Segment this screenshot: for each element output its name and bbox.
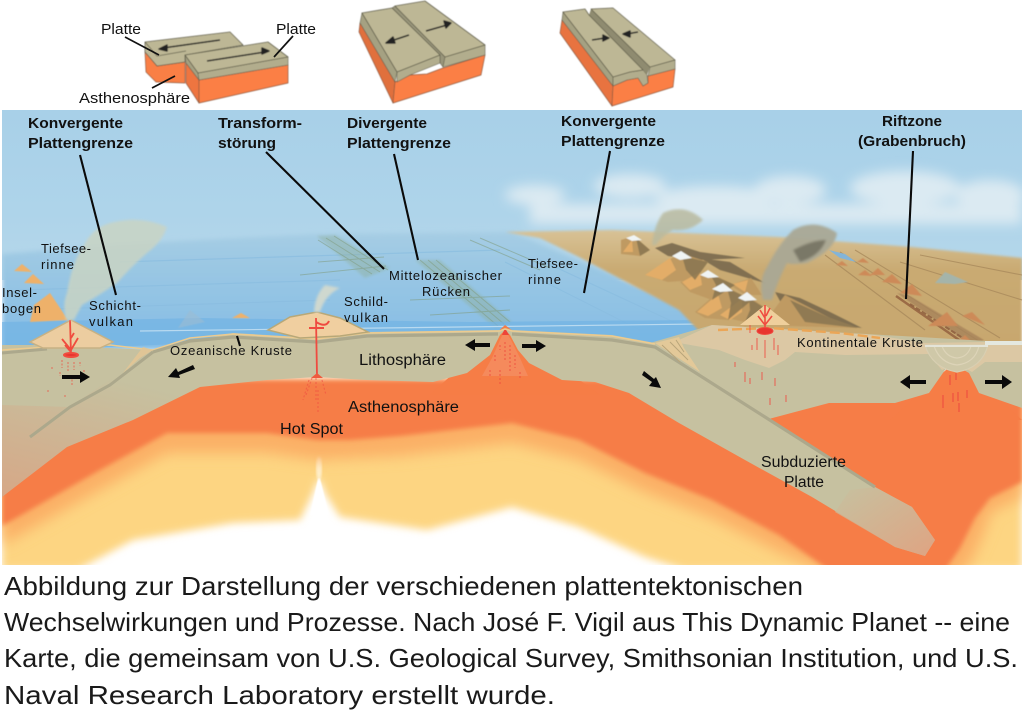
caption: Karte, die gemeinsam von U.S. Geological Survey, Smithsonian Institution, und U.S. xyxy=(4,643,1018,673)
label: Tiefseerinne left: rinne xyxy=(41,257,74,272)
lithosphere main plate xyxy=(2,328,935,556)
diagram: divergent block xyxy=(359,1,485,103)
hot spot white tip xyxy=(312,456,326,506)
label: Asthenosphaere top xyxy=(79,76,190,107)
plume continent far xyxy=(652,209,703,245)
continental crust xyxy=(679,325,1022,372)
transition layer yellow-orange xyxy=(2,380,1022,575)
label: Inselbogen xyxy=(2,285,41,316)
label: Mittelozeanischer Ruecken: Rücken xyxy=(422,284,470,299)
label: Tiefseerinne right: rinne xyxy=(528,272,561,287)
leader lines xyxy=(80,151,913,346)
arrows: plate motion xyxy=(62,339,1012,389)
magma left xyxy=(48,320,84,398)
label: Ozeanische Kruste: Ozeanische Kruste xyxy=(170,343,292,358)
clouds xyxy=(505,171,1024,224)
ocean xyxy=(2,232,720,350)
panel: tectonic cross section xyxy=(2,110,1024,575)
shield volcano xyxy=(268,312,368,338)
label: Lithosphaere: Lithosphäre xyxy=(359,352,446,369)
continental strata xyxy=(718,328,880,338)
label: Inselbogen: bogen xyxy=(2,301,41,316)
ocean trench shading xyxy=(135,250,594,288)
label: Tiefseerinne left xyxy=(41,241,91,272)
label: Transformstoerung xyxy=(218,115,302,152)
islands xyxy=(14,264,250,328)
label: Divergente Plattengrenze xyxy=(347,115,451,152)
rift graben xyxy=(896,293,984,340)
land xyxy=(505,230,1022,345)
label: Mittelozeanischer Ruecken: Mittelozeanischer xyxy=(389,268,503,283)
label: Riftzone xyxy=(858,113,966,150)
rift crust arcs xyxy=(925,343,1022,372)
label: Divergente Plattengrenze: Divergente xyxy=(347,115,427,132)
arrows: transform motion xyxy=(159,40,269,61)
volcano cone left xyxy=(30,320,113,348)
lake xyxy=(829,250,856,262)
label: Transformstoerung: Transform- xyxy=(218,115,302,132)
diagram: transform fault block xyxy=(145,32,288,103)
sky xyxy=(2,110,1022,280)
label: Konvergente Plattengrenze right: Plattengrenze xyxy=(561,133,665,150)
rift magma xyxy=(943,373,967,412)
label: Subduzierte Platte: Subduzierte xyxy=(761,454,846,471)
asthenosphere orange xyxy=(2,380,1022,570)
label: Platte right: Platte xyxy=(276,21,316,38)
plume shield xyxy=(314,285,340,312)
ridge and rift orange fill beneath plates xyxy=(430,325,1022,420)
left orange under arc xyxy=(2,400,70,460)
label: Konvergente Plattengrenze left: Plattengrenze xyxy=(28,135,133,152)
caption: Wechselwirkungen und Prozesse. Nach José F. Vigil aus This Dynamic Planet -- eine xyxy=(4,607,1010,637)
label: Tiefseerinne left: Tiefsee- xyxy=(41,241,91,256)
label: Hot Spot: Hot Spot xyxy=(280,421,344,438)
ridge magma xyxy=(482,328,528,385)
label: Schildvulkan: Schild- xyxy=(344,294,388,309)
label: Mittelozeanischer Ruecken xyxy=(389,268,503,299)
magma continental volcano xyxy=(735,305,786,405)
accretion wedge right xyxy=(655,337,700,372)
rift lines xyxy=(825,250,1022,345)
mid-ocean ridge stripes xyxy=(300,235,550,328)
caption xyxy=(4,571,1018,710)
caption: Abbildung zur Darstellung der verschiedenen plattentektonischen xyxy=(4,571,803,601)
label: Schichtvulkan: Schicht- xyxy=(89,298,141,313)
continental lithosphere right xyxy=(650,325,1022,420)
arrows: convergent motion xyxy=(592,31,638,41)
label: Asthenosphaere top: Asthenosphäre xyxy=(79,90,190,107)
label: Transformstoerung: störung xyxy=(218,135,276,152)
label: Schichtvulkan: vulkan xyxy=(89,314,133,329)
plume continent near xyxy=(761,225,837,300)
caption: Naval Research Laboratory erstellt wurde. xyxy=(4,680,555,710)
diagram: convergent block xyxy=(560,8,675,106)
label: Riftzone: Riftzone xyxy=(882,113,942,130)
mantle yellow layer xyxy=(2,400,1022,570)
label: Schildvulkan xyxy=(344,294,388,325)
label: Schildvulkan: vulkan xyxy=(344,310,388,325)
label: Asthenosphaere: Asthenosphäre xyxy=(348,399,459,416)
label: Platte left: Platte xyxy=(101,21,141,38)
label: Kontinentale Kruste: Kontinentale Kruste xyxy=(797,335,923,350)
oceanic crust stripes xyxy=(2,329,875,487)
label: Tiefseerinne right xyxy=(528,256,578,287)
volcano cone continent xyxy=(740,305,790,325)
mountains xyxy=(621,235,985,345)
label: Platte right xyxy=(274,21,316,57)
overriding lithosphere left xyxy=(2,345,141,406)
label: Riftzone: (Grabenbruch) xyxy=(858,133,966,150)
label: Inselbogen: Insel- xyxy=(2,285,37,300)
accretion wedge left xyxy=(123,347,153,373)
label: Platte left xyxy=(101,21,159,55)
label: Konvergente Plattengrenze left: Konvergente xyxy=(28,115,123,132)
label: Konvergente Plattengrenze right xyxy=(561,113,665,150)
label: Subduzierte Platte: Platte xyxy=(784,474,824,491)
label: Divergente Plattengrenze: Plattengrenze xyxy=(347,135,451,152)
plate fade at tip xyxy=(835,487,935,556)
magma hot spot xyxy=(303,318,329,412)
arrows: divergent motion xyxy=(386,21,451,43)
label: Schichtvulkan xyxy=(89,298,141,329)
water front strip xyxy=(2,318,696,348)
plume left xyxy=(64,220,167,320)
label: Tiefseerinne right: Tiefsee- xyxy=(528,256,578,271)
label: Subduzierte Platte xyxy=(761,454,846,491)
label: Konvergente Plattengrenze left xyxy=(28,115,133,152)
label: Konvergente Plattengrenze right: Konvergente xyxy=(561,113,656,130)
